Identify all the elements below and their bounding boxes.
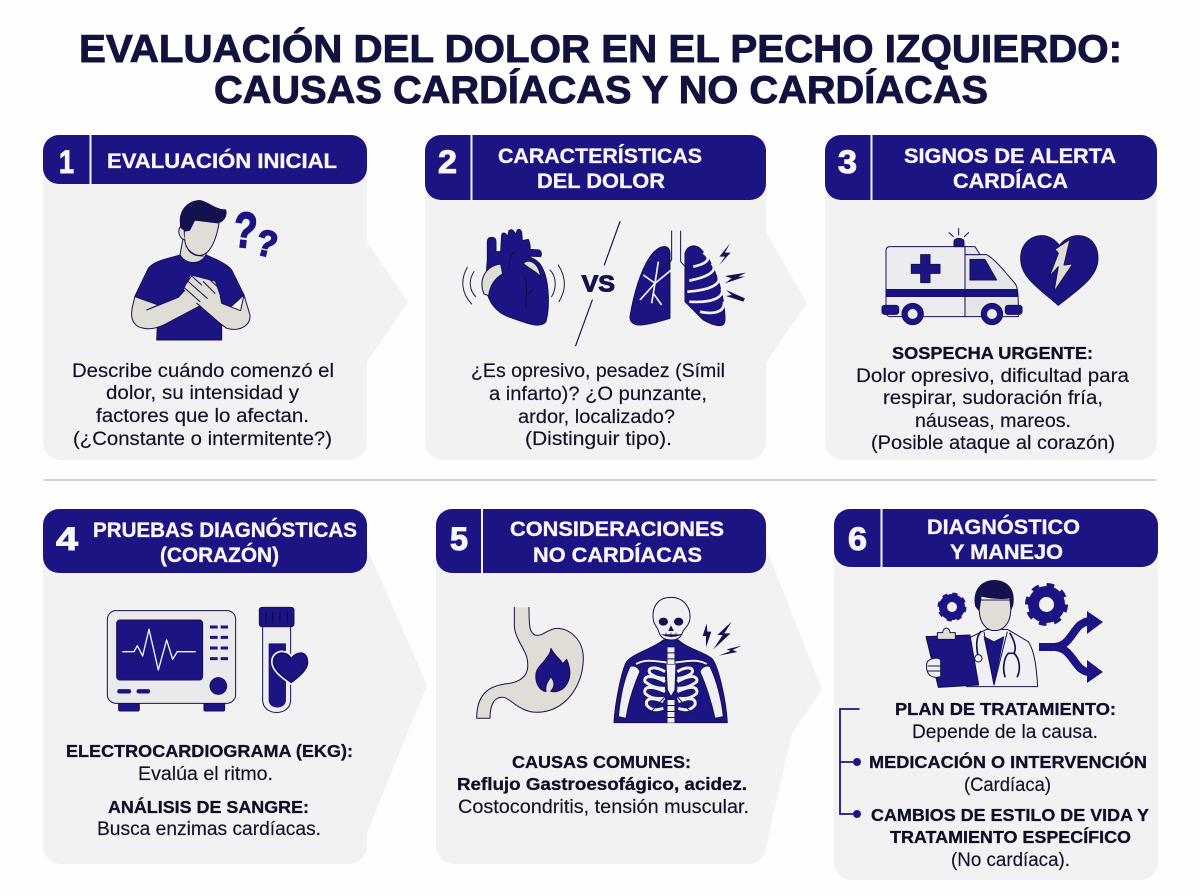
header 4: 4 — [56, 521, 78, 557]
header 6: Y MANEJO — [950, 540, 1063, 564]
header 6: DIAGNÓSTICO — [927, 514, 1080, 539]
body text 1: factores que lo afectan. — [96, 406, 309, 427]
body text 5: CAUSAS COMUNES: — [512, 752, 691, 772]
header 5: CONSIDERACIONES — [510, 517, 724, 541]
body text 1: dolor, su intensidad y — [106, 383, 300, 404]
panel 6: diagnóstico y manejo — [834, 509, 1158, 880]
body text 2: ardor, localizado? — [518, 407, 675, 428]
icon: broken heart with lightning bolt — [1021, 236, 1098, 305]
body text 1: Describe cuándo comenzó el — [72, 361, 334, 382]
header 2: 2 — [438, 144, 457, 180]
body text 4: ANÁLISIS DE SANGRE: — [108, 796, 309, 817]
panel 3: signos de alerta cardíaca — [825, 135, 1157, 460]
heart — [463, 230, 564, 325]
header 2: DEL DOLOR — [537, 169, 665, 193]
body text 4: Evalúa el ritmo. — [138, 764, 273, 785]
header 4: (CORAZÓN) — [160, 542, 279, 567]
icon: small gear — [940, 595, 964, 619]
header 4: PRUEBAS DIAGNÓSTICAS — [93, 517, 357, 542]
icon: ambulance — [882, 228, 1022, 325]
body text 1 — [72, 361, 334, 450]
body text 4: ELECTROCARDIOGRAMA (EKG): — [66, 741, 353, 761]
panel 4: pruebas diagnósticas — [43, 509, 427, 864]
panel 5: consideraciones no cardíacas — [436, 509, 822, 864]
header 2: CARACTERÍSTICAS — [498, 143, 702, 168]
title: CAUSAS CARDÍACAS Y NO CARDÍACAS — [214, 68, 988, 112]
header 5 — [436, 509, 766, 573]
body text 3: Dolor opresivo, dificultad para — [856, 366, 1129, 387]
panel 2: características del dolor — [425, 135, 807, 460]
icon: blood test tube with heart — [259, 607, 308, 712]
body text 4: Busca enzimas cardíacas. — [97, 819, 321, 840]
title — [79, 27, 1122, 112]
body text 3 — [856, 343, 1129, 454]
body text 1: (¿Constante o intermitente?) — [73, 429, 332, 450]
divider and VS — [576, 222, 620, 346]
body text 5 — [457, 752, 749, 818]
header 2 — [425, 135, 766, 200]
icon: skeleton with pain bolts — [614, 597, 742, 723]
body text 6: CAMBIOS DE ESTILO DE VIDA Y — [871, 805, 1149, 825]
body text 6 — [869, 699, 1149, 871]
divider and VS: VS — [582, 271, 615, 297]
icon: stomach with flame — [477, 607, 583, 718]
icon: man holding chest with question marks: ? — [231, 201, 260, 259]
body text 3: náuseas, mareos. — [915, 411, 1071, 432]
header 3: 3 — [838, 144, 857, 180]
header 3: SIGNOS DE ALERTA — [904, 144, 1116, 168]
icon: man holding chest with question marks — [132, 200, 282, 340]
body text 2: a infarto)? ¿O punzante, — [489, 384, 707, 405]
header 5: NO CARDÍACAS — [533, 542, 702, 567]
body text 6: Depende de la causa. — [912, 722, 1098, 743]
body text 2 — [471, 361, 725, 450]
panel 1: evaluación inicial — [43, 135, 408, 460]
icon: doctor with clipboard — [926, 580, 1038, 687]
body text 6: TRATAMIENTO ESPECÍFICO — [890, 826, 1131, 847]
body text 6: MEDICACIÓN O INTERVENCIÓN — [869, 751, 1147, 772]
icon: branching arrows — [1039, 611, 1103, 683]
header 3: CARDÍACA — [953, 168, 1068, 193]
icon: heart versus lungs — [463, 222, 746, 346]
header 1: 1 — [59, 144, 74, 180]
body text 3: respirar, sudoración fría, — [883, 388, 1103, 409]
header 1: EVALUACIÓN INICIAL — [107, 148, 337, 173]
body text 4 — [66, 741, 353, 840]
body text 5: Costocondritis, tensión muscular. — [458, 797, 749, 818]
header 3 — [825, 135, 1157, 200]
body text 2: ¿Es opresivo, pesadez (Símil — [471, 361, 725, 382]
header 4 — [43, 509, 367, 573]
body text 2: (Distinguir tipo). — [525, 429, 672, 450]
header 6 — [834, 509, 1158, 567]
body text 6: (Cardíaca) — [964, 775, 1051, 796]
decision tree connector — [840, 709, 861, 818]
body text 5: Reflujo Gastroesofágico, acidez. — [457, 774, 747, 794]
title: EVALUACIÓN DEL DOLOR EN EL PECHO IZQUIERDO: — [79, 27, 1122, 71]
body text 3: (Posible ataque al corazón) — [871, 433, 1115, 454]
header 6: 6 — [848, 521, 867, 557]
body text 6: (No cardíaca). — [951, 850, 1070, 871]
icon: ECG monitor — [107, 611, 236, 711]
body text 6: PLAN DE TRATAMIENTO: — [895, 699, 1116, 719]
icon: man holding chest with question marks: ? — [252, 221, 282, 266]
header 1 — [43, 135, 367, 184]
lungs — [630, 231, 746, 326]
header 5: 5 — [450, 521, 468, 557]
body text 3: SOSPECHA URGENTE: — [892, 343, 1093, 363]
icon: large gear — [1028, 586, 1065, 623]
